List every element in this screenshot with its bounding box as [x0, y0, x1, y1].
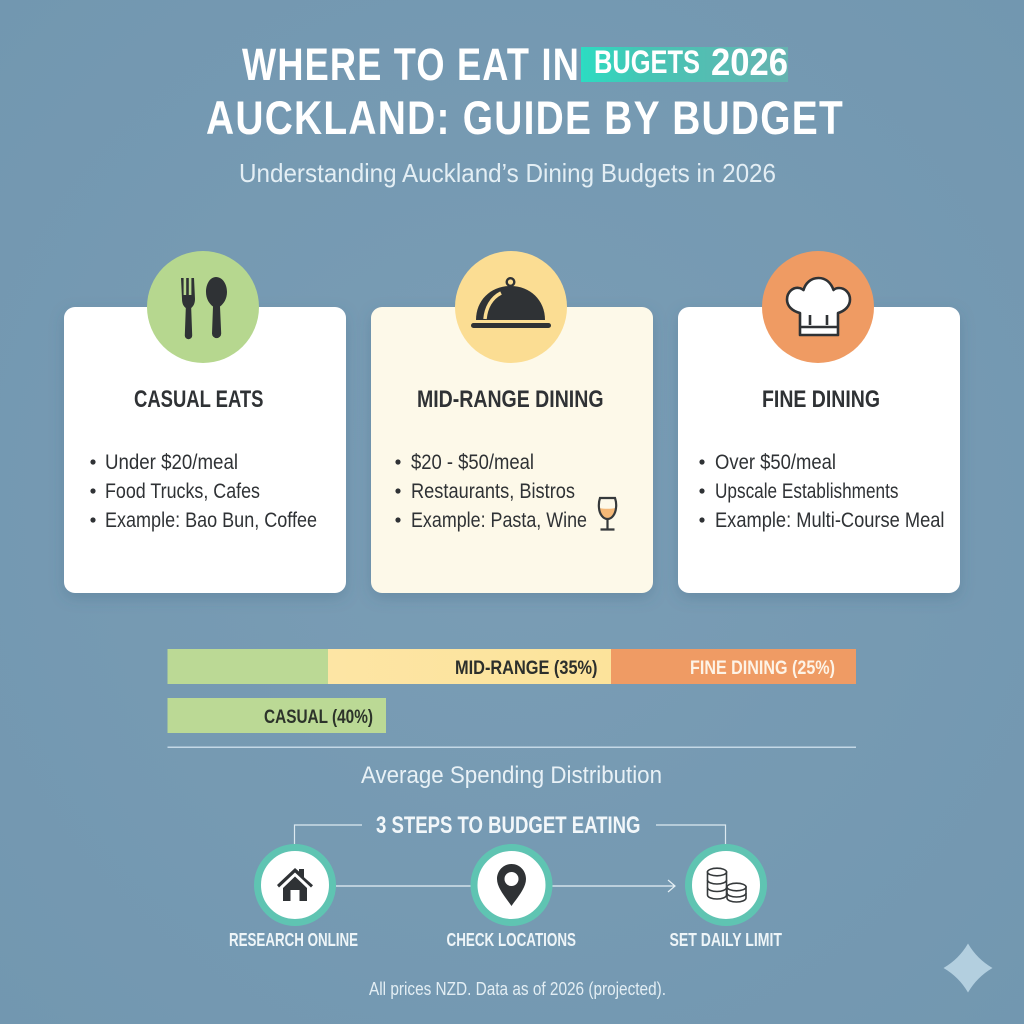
bullet list: Upscale Establishments — [715, 480, 898, 503]
step 1: research online — [229, 848, 358, 950]
title highlight: budgets 2026 — [581, 42, 788, 84]
step 2: check locations — [446, 848, 576, 950]
heading: CASUAL EATS — [134, 386, 264, 413]
title highlight: budgets 2026: 2026 — [711, 42, 788, 84]
icon: coin stacks — [708, 868, 746, 902]
bar chart: spending distribution — [168, 649, 856, 789]
step 3: set daily limit — [670, 848, 782, 950]
panel: mid-range dining — [371, 251, 653, 593]
steps heading: 3 STEPS TO BUDGET EATING — [376, 812, 640, 839]
arrow connector — [336, 880, 675, 892]
heading: FINE DINING — [762, 386, 880, 413]
panel: fine dining — [678, 251, 960, 593]
title: WHERE TO EAT IN — [242, 39, 580, 90]
bullet list: $20 - $50/meal — [411, 451, 534, 474]
bullet list — [90, 451, 317, 532]
bullet list: Over $50/meal — [715, 451, 836, 474]
title: AUCKLAND: GUIDE BY BUDGET — [206, 91, 844, 144]
panel: casual eats — [64, 251, 346, 593]
step 3: set daily limit: SET DAILY LIMIT — [670, 930, 782, 950]
icon: wine glass — [599, 498, 616, 530]
title — [206, 39, 844, 144]
icon: house — [277, 868, 313, 901]
bullet list: Restaurants, Bistros — [411, 480, 575, 503]
bracket lines — [294, 825, 726, 844]
casual bar — [168, 698, 386, 733]
icon: location pin — [497, 864, 526, 906]
stacked bar: FINE DINING (25%) — [690, 658, 835, 679]
icon: chef hat on orange circle — [762, 251, 874, 363]
steps section — [229, 812, 782, 950]
subtitle: Understanding Auckland’s Dining Budgets in 2026 — [239, 158, 776, 188]
bullet list — [699, 451, 944, 532]
step 1: research online: RESEARCH ONLINE — [229, 930, 358, 950]
footer note: All prices NZD. Data as of 2026 (projected). — [369, 979, 666, 999]
bullet list: Example: Multi-Course Meal — [715, 509, 944, 532]
icon: sparkle star — [944, 944, 992, 992]
bullet list: Example: Bao Bun, Coffee — [105, 509, 317, 532]
bullet list — [395, 451, 587, 532]
bullet list: Under $20/meal — [105, 451, 238, 474]
stacked bar: MID-RANGE (35%) — [455, 658, 598, 679]
icon: cloche on yellow circle — [455, 251, 567, 363]
title highlight: budgets 2026: BUGETS — [594, 44, 700, 80]
icon: fork and spoon on green circle — [147, 251, 259, 363]
casual bar: CASUAL (40%) — [264, 707, 373, 728]
bullet list: Example: Pasta, Wine — [411, 509, 587, 532]
bullet list: Food Trucks, Cafes — [105, 480, 260, 503]
step 2: check locations: CHECK LOCATIONS — [446, 930, 576, 950]
heading: MID-RANGE DINING — [417, 386, 604, 413]
stacked bar — [168, 649, 856, 684]
chart caption: Average Spending Distribution — [361, 762, 662, 789]
